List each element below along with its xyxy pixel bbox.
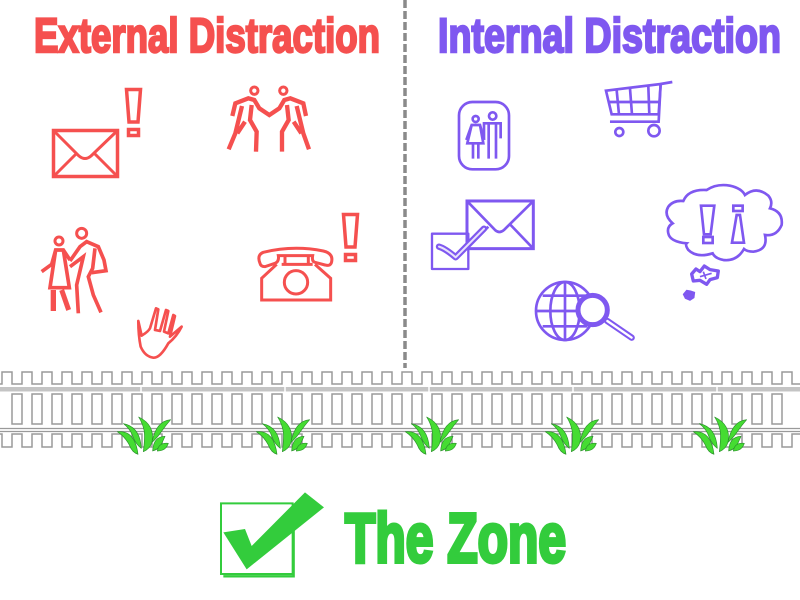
title: External Distraction: External Distraction bbox=[34, 10, 380, 63]
heading: The Zone: The Zone bbox=[345, 499, 566, 577]
icon: telephone with exclamation bbox=[259, 214, 358, 300]
icon: envelope with checkbox bbox=[432, 201, 533, 269]
icon: thought cloud with symbols bbox=[667, 185, 782, 300]
icon: raised hand bbox=[138, 308, 182, 358]
icon: shopping cart bbox=[606, 82, 672, 136]
icon: walking couple bbox=[42, 228, 106, 313]
icon: green check box bbox=[221, 492, 324, 576]
divider between external and internal bbox=[403, 0, 407, 368]
icon: globe with magnifying glass bbox=[536, 282, 632, 340]
grass tufts along the track bbox=[117, 417, 747, 454]
railway track bbox=[0, 372, 800, 447]
icon: envelope with exclamation bbox=[54, 90, 140, 176]
icon: people shaking hands bbox=[229, 87, 309, 152]
icon: couple sign bbox=[459, 102, 509, 169]
